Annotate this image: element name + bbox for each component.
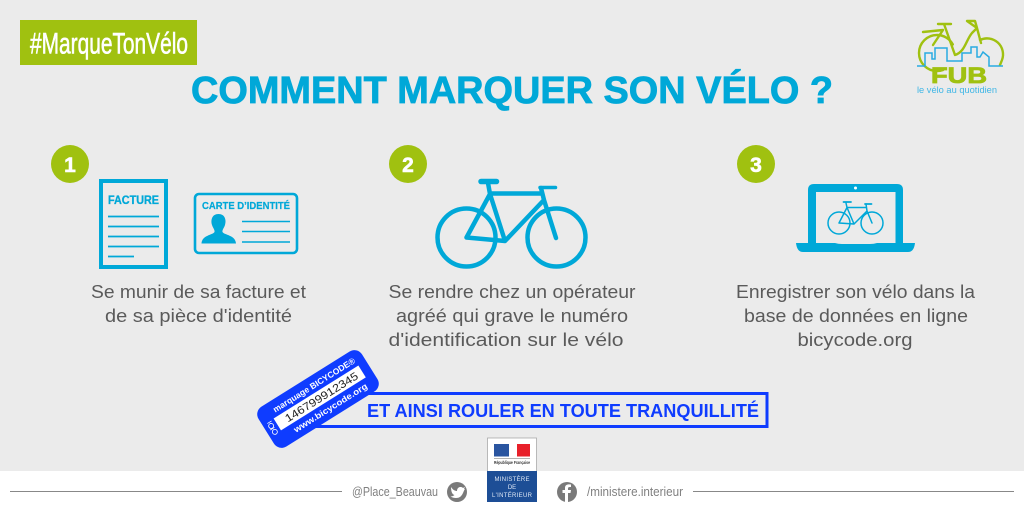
- icon: laptop with bicycle: [796, 184, 915, 252]
- step 1 number badge: 1: [64, 154, 76, 177]
- bicycode sticker: www.bicycode.org: [291, 381, 369, 435]
- bicycode sticker: marquage BICYCODE®: [271, 355, 358, 414]
- hashtag badge: [20, 20, 197, 65]
- icon: invoice: FACTURE: [108, 195, 159, 207]
- logo: FUB: [917, 21, 1003, 96]
- title: COMMENT MARQUER SON VÉLO ?: [191, 68, 833, 112]
- step 1 number badge: [51, 145, 89, 183]
- step 1 text: [91, 281, 306, 326]
- step 2 number badge: [389, 145, 427, 183]
- step 1 panel: [51, 145, 306, 326]
- step 3 number badge: [737, 145, 775, 183]
- hashtag badge: #MarqueTonVélo: [30, 28, 188, 60]
- step 2 text: d'identification sur le vélo: [388, 329, 624, 350]
- bicycode sticker: [254, 347, 382, 451]
- step 2 panel: [388, 145, 636, 350]
- ministry logo: L'INTÉRIEUR: [492, 492, 533, 499]
- callout: et ainsi rouler: [305, 394, 767, 426]
- icon: identity card: CARTE D’IDENTITÉ: [202, 199, 290, 212]
- footer left rule: [10, 490, 342, 492]
- step 2 text: Se rendre chez un opérateur: [388, 281, 636, 302]
- footer facebook handle: /ministere.interieur: [587, 484, 684, 499]
- step 1 text: de sa pièce d'identité: [105, 305, 292, 326]
- ministry logo: DE: [508, 485, 516, 491]
- ministry logo: [487, 438, 537, 502]
- step 2 number badge: 2: [402, 154, 414, 177]
- step 2 text: agréé qui grave le numéro: [396, 305, 628, 326]
- icon: bicycle: [438, 182, 586, 266]
- ministry logo: MINISTÈRE: [494, 476, 530, 483]
- ministry logo: République Française: [494, 460, 530, 465]
- bicycode sticker: 146799912345: [283, 370, 361, 425]
- step 3 number badge: 3: [750, 154, 762, 177]
- logo: FUB: FUB: [931, 63, 987, 88]
- step 3 text: base de données en ligne: [744, 305, 968, 326]
- step 3 text: Enregistrer son vélo dans la: [736, 281, 976, 302]
- step 3 panel: [736, 145, 976, 350]
- callout: et ainsi rouler: ET AINSI ROULER EN TOUTE TRANQUILLITÉ: [367, 400, 759, 421]
- step 3 text: [736, 281, 976, 350]
- step 2 text: [388, 281, 636, 350]
- footer band: [0, 471, 1024, 512]
- icon: twitter: [447, 482, 467, 502]
- step 3 text: bicycode.org: [798, 329, 912, 350]
- footer right rule: [693, 490, 1014, 492]
- icon: invoice: [101, 181, 166, 267]
- icon: identity card: [195, 194, 297, 253]
- step 1 text: Se munir de sa facture et: [91, 281, 306, 302]
- logo: FUB: le vélo au quotidien: [917, 85, 997, 96]
- icon: facebook: [557, 482, 577, 502]
- footer twitter handle: @Place_Beauvau: [352, 485, 438, 499]
